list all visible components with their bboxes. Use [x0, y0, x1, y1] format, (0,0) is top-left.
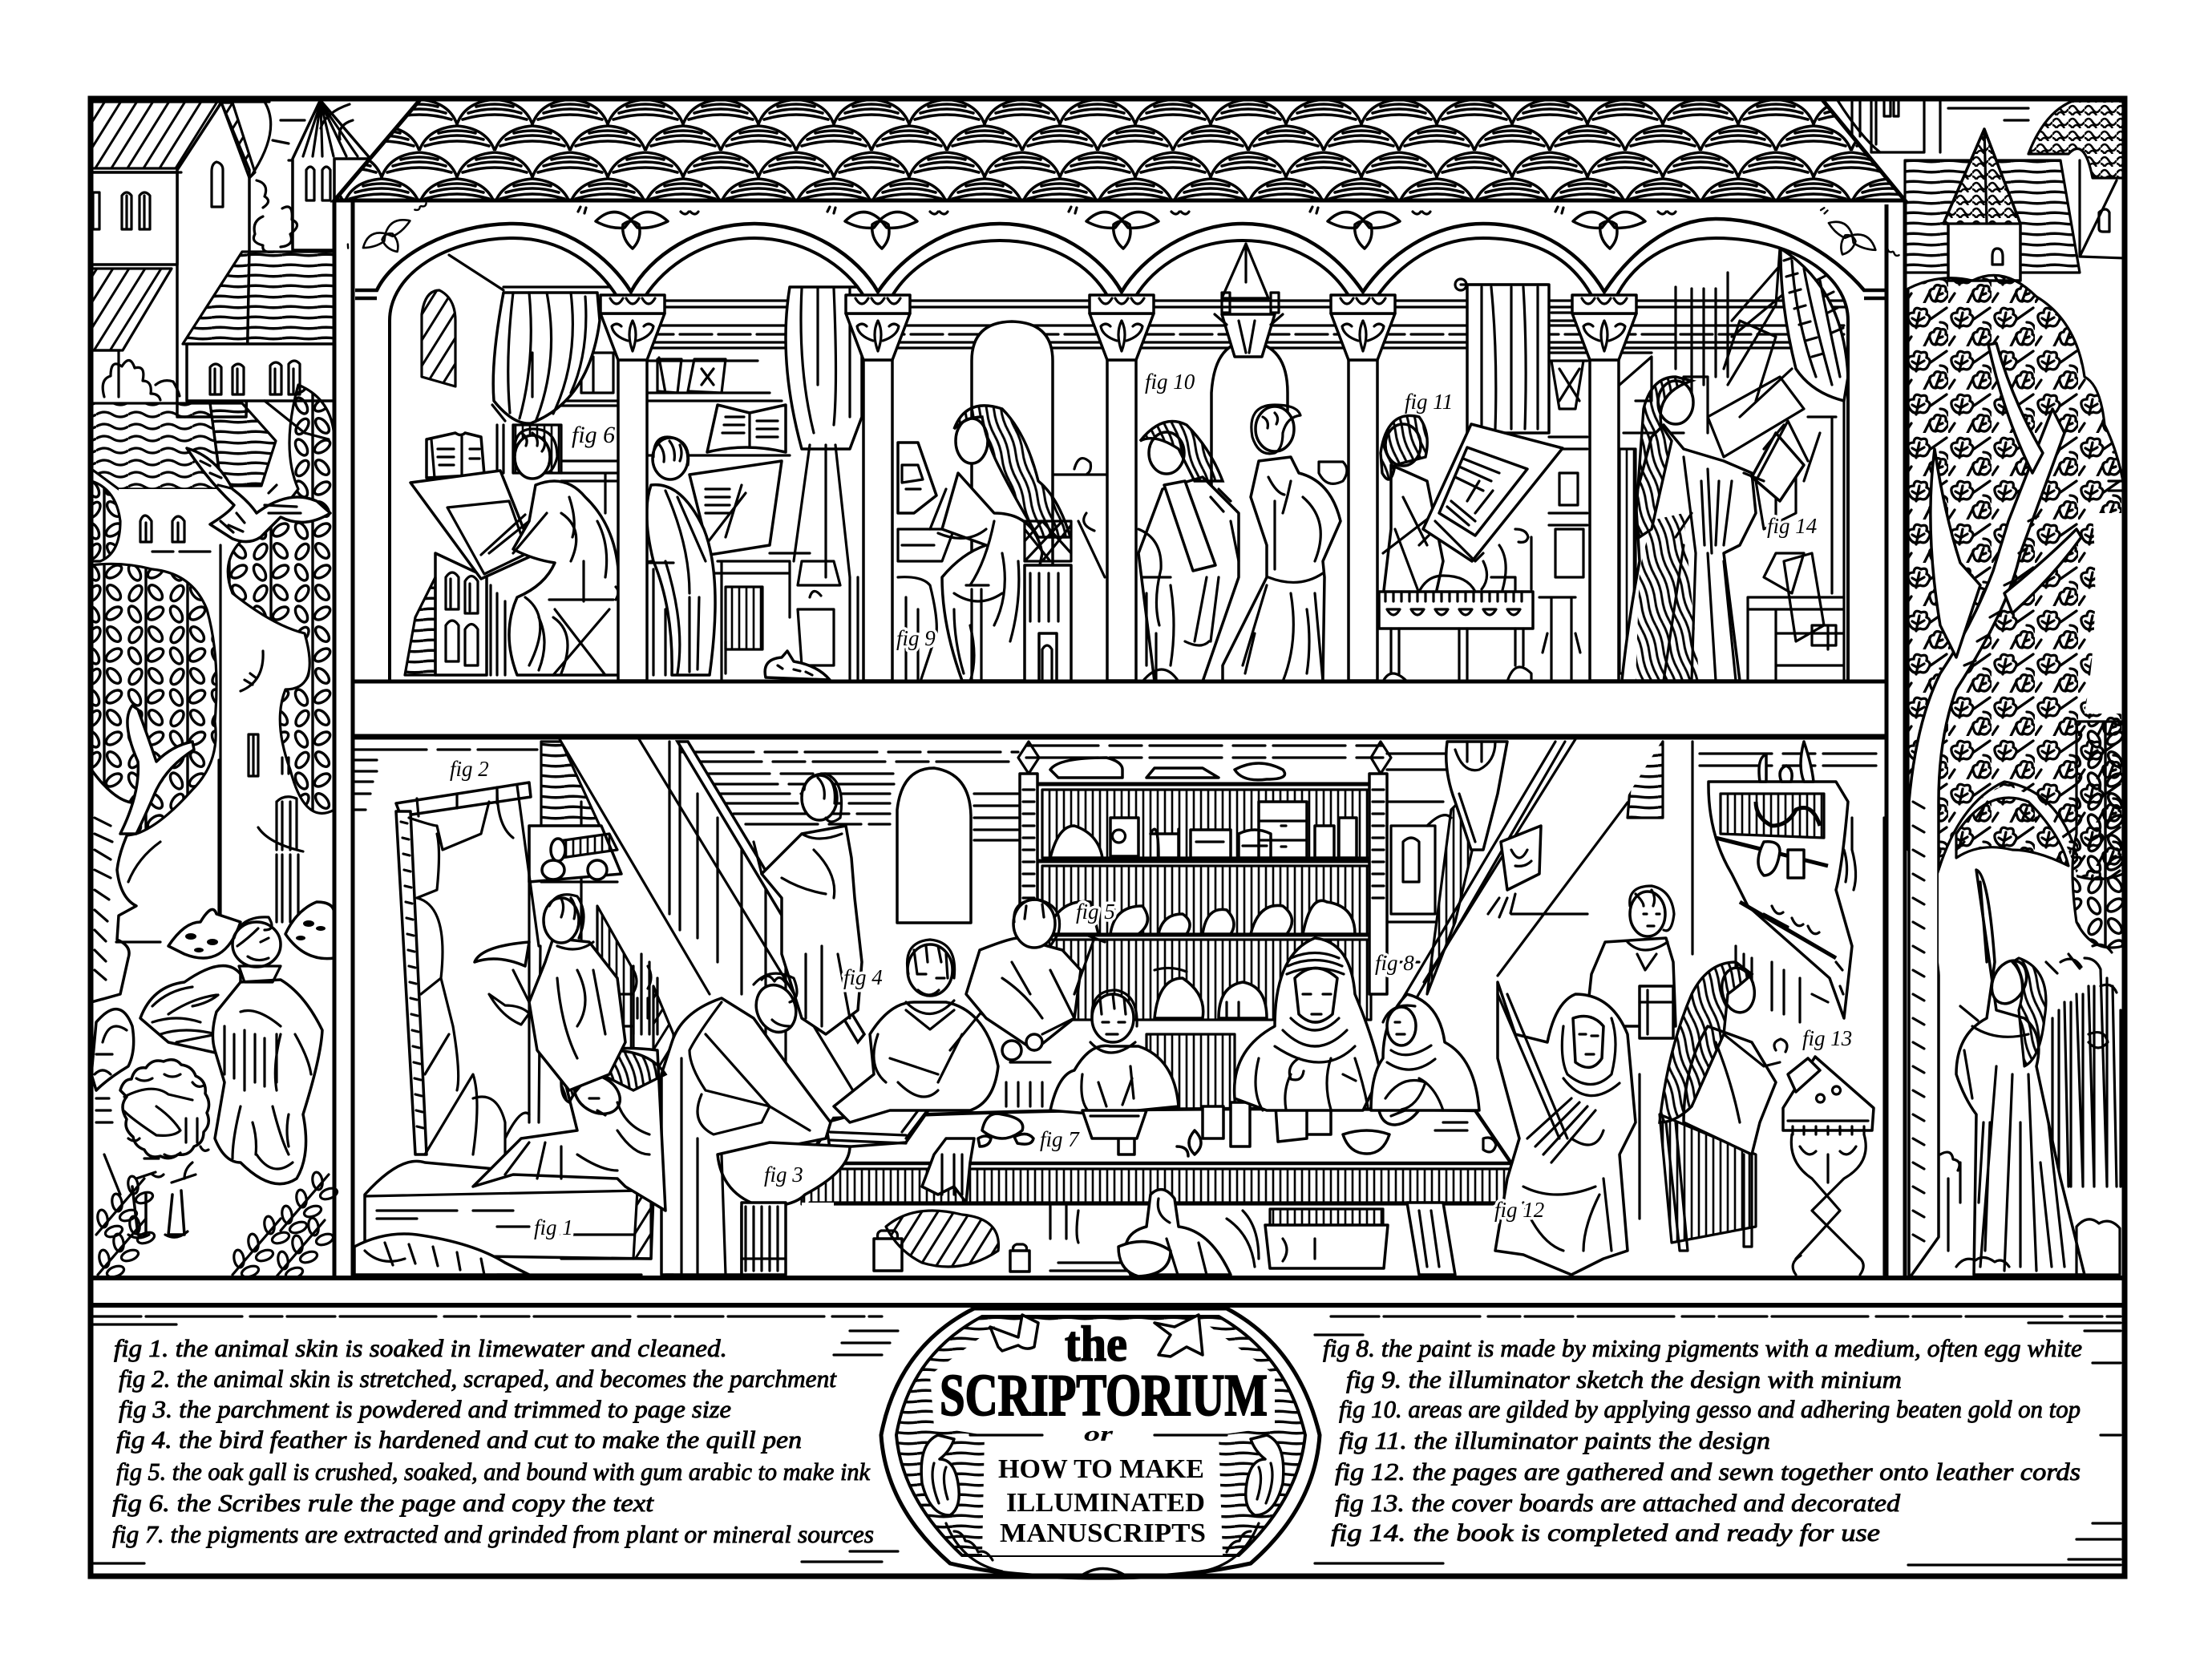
fig 3 label: fig 3 [764, 1163, 803, 1187]
cartouche leaf left [990, 1315, 1038, 1351]
curtain bay 2 [786, 287, 862, 449]
panel: town and tree on the right [1836, 98, 2125, 1279]
striped roof behind turret [1905, 160, 2080, 273]
top shelf items [1050, 758, 1284, 780]
figure: monk with hammer [966, 900, 1105, 1106]
curtain bay 5 [1467, 285, 1549, 433]
page lectern [689, 461, 782, 555]
eagle in flight [187, 401, 330, 542]
lattice chair [1025, 521, 1071, 561]
fig 2 label: fig 2 [450, 757, 489, 781]
background tower [233, 102, 305, 249]
figure: boy cutting quill [834, 940, 998, 1122]
fig 12 label: fig 12 [1494, 1198, 1544, 1222]
fig 11 label: fig 11 [1405, 390, 1453, 414]
figure: long-haired woman at desk [1640, 962, 1787, 1251]
cartouche [881, 1308, 1320, 1578]
heading: the: the [1065, 1317, 1127, 1372]
upper floor: bay 6 woman with book [1620, 249, 1848, 681]
reading book [427, 433, 484, 478]
box on floor [1265, 1209, 1388, 1268]
lower floor [354, 739, 1885, 1276]
striped side roof [210, 403, 276, 486]
oak foliage [1908, 275, 2123, 879]
middle shelf items [1046, 900, 1355, 934]
fig 10 label: fig 10 [1145, 370, 1195, 394]
wall hatch triangle left [541, 742, 600, 826]
frieze table [1379, 592, 1533, 629]
window ruin and broken column [249, 734, 303, 922]
fig 8 label: fig 8 [1375, 951, 1414, 975]
figure: monk with stretched skin [475, 895, 625, 1090]
hedge [140, 966, 241, 1058]
subheading line 3: MANUSCRIPTS [1000, 1518, 1206, 1548]
legend: figures 1 to 7: fig 3. the parchment is powdered and trimmed to page size [119, 1395, 731, 1423]
heading: Scriptorium: SCRIPTORIUM [940, 1363, 1268, 1429]
cat [765, 651, 830, 680]
legend: figures 8 to 14: fig 10. areas are gilded by applying gesso and adhering beaten gold on top [1339, 1395, 2081, 1423]
upper floor: bay 5 painter [1379, 279, 1587, 681]
open book on shelf [707, 405, 786, 452]
lower shelf items [1155, 978, 1267, 1018]
wavy tiled roof [91, 403, 221, 489]
acanthus left [921, 1435, 959, 1515]
fig 5 label: fig 5 [1076, 900, 1115, 924]
table items [826, 1090, 1496, 1203]
legend: figures 1 to 7 [112, 1334, 874, 1548]
lower shelf books and chest [1748, 473, 1844, 681]
back building top right [1836, 98, 2028, 152]
figure: shepherd monk [212, 917, 322, 1184]
fig 14 label: fig 14 [1767, 514, 1817, 538]
dog with bowl [1118, 1190, 1259, 1276]
siding hatch beside lectern [405, 577, 435, 675]
slanted desk [898, 443, 936, 513]
fig 1 label: fig 1 [534, 1215, 573, 1239]
legend: figures 1 to 7: fig 4. the bird feather is hardened and cut to make the quill pen [116, 1425, 802, 1454]
upper floor: bay 2 reader [643, 287, 862, 681]
standing boy behind [1511, 886, 1676, 1026]
floor plants and jars [874, 1211, 1138, 1272]
lower town wall [119, 489, 218, 491]
legend: figures 8 to 14: fig 12. the pages are gathered and sewn together onto leather cords [1335, 1458, 2081, 1486]
big white staircase stringer left [560, 739, 856, 1096]
chair [643, 561, 673, 675]
figure: monk on stairs [754, 774, 862, 1034]
cartouche leaf right [1155, 1315, 1203, 1357]
siding, back wall [354, 739, 1885, 1276]
front wall with arches [353, 200, 1886, 681]
outer arch line [355, 219, 1886, 298]
stretched skin outline [409, 790, 529, 1154]
stretching frame [396, 782, 540, 1154]
bushes behind shepherd [168, 909, 241, 958]
chair [1660, 1114, 1756, 1243]
writing board [410, 471, 534, 579]
long table apron [802, 1109, 1511, 1204]
legend: figures 1 to 7: fig 6. the Scribes rule the page and copy the text [112, 1489, 655, 1517]
figure: young woman at table [1371, 994, 1479, 1110]
bottom shelf area left [609, 954, 657, 1034]
foliage: right of bird [228, 385, 334, 813]
table legs [802, 1203, 1455, 1275]
lower house with windows [187, 344, 334, 401]
shrubs bottom right [1940, 1152, 2120, 1275]
upper floor: bay 1 scribe [390, 237, 619, 678]
small window [422, 290, 455, 386]
slanted gilding desk [1164, 481, 1215, 571]
legend: figures 8 to 14: fig 8. the paint is made by mixing pigments with a medium, often egg white [1323, 1334, 2082, 1362]
hanging acorn branch [1956, 798, 2068, 866]
figure: woman reaching into tree [1956, 870, 2085, 1275]
figure from behind [647, 485, 715, 675]
floor beam [353, 681, 1886, 736]
legend: figures 1 to 7: fig 5. the oak gall is crushed, soaked, and bound with gum arabic to make ink [116, 1458, 871, 1486]
subheading line 2: ILLUMINATED [1006, 1488, 1205, 1518]
turret [1943, 129, 2020, 281]
legend: figures 8 to 14: fig 9. the illuminator sketch the design with minium [1346, 1365, 1902, 1393]
spandrel leaf ornaments [346, 200, 1901, 279]
figure: trimming monk with fig 3 cloth [661, 973, 850, 1275]
footer border lines [91, 1278, 2123, 1305]
legend: figures 1 to 7: fig 1. the animal skin is soaked in limewater and cleaned. [114, 1334, 727, 1362]
figure: nun fig 8 [1235, 938, 1381, 1110]
hanging skins on table edge [922, 1138, 974, 1203]
upper floor: bay 3 window and illuminator [896, 321, 1106, 681]
figure: woman leaning over vat [473, 1049, 665, 1211]
right stair and hanging monk [1387, 739, 1663, 1110]
back shelves [541, 802, 617, 1058]
fig 4 label: fig 4 [843, 965, 883, 989]
shelf and books behind curtain [561, 353, 619, 513]
foliage: small bush under roof [91, 481, 120, 561]
left building and windows [91, 172, 177, 265]
pile of paper [826, 1097, 934, 1148]
lectern base [435, 553, 487, 675]
tree trunk left [93, 770, 138, 1003]
siding right [1628, 742, 1663, 818]
chandelier [1222, 244, 1268, 298]
legend: figures 8 to 14: fig 13. the cover boards are attached and decorated [1335, 1489, 1901, 1517]
upper fork branches [1988, 343, 2081, 613]
panel: building interior [334, 98, 1905, 1279]
held book [1752, 433, 1804, 501]
cartouche white center [930, 1321, 1275, 1555]
tree trunk with bark marks [1909, 409, 2064, 1279]
legend: figures 8 to 14: fig 11. the illuminator paints the design [1339, 1426, 1770, 1454]
building outer walls [334, 200, 1905, 1279]
hatch behind monk on left [597, 906, 633, 1066]
acanthus right [1246, 1435, 1284, 1515]
hammer [1074, 934, 1105, 994]
stair balusters and handrail [669, 742, 864, 1066]
small bush [103, 360, 180, 400]
wall panel [1692, 742, 1884, 1275]
woman illuminator [942, 473, 1042, 681]
lamp post [217, 758, 220, 914]
back curtain column [1676, 273, 1728, 401]
floor skins left [354, 1234, 529, 1275]
fig 9 label: fig 9 [896, 626, 936, 650]
connector: or: or [1084, 1422, 1114, 1446]
wall cabinet [1709, 742, 1856, 1022]
falling feather [241, 651, 263, 691]
painter figure [1383, 465, 1443, 597]
roof of scale tiles [334, 98, 1905, 200]
stacks of rolls [529, 826, 621, 882]
upper floor background wall [353, 200, 1886, 681]
bookshelves [1620, 249, 1804, 457]
columns with capitals [601, 295, 1636, 681]
book stack in hands of boy [1640, 986, 1673, 1038]
figure: sheep front [120, 1060, 209, 1238]
reeds right [2046, 944, 2121, 1187]
fig 1 vat [365, 1161, 653, 1259]
hunched gilder [1138, 477, 1239, 681]
second striped roof [91, 269, 172, 350]
fig 6 label: fig 6 [572, 422, 615, 448]
striped rooftop top left [91, 102, 221, 168]
big book on lectern [1423, 424, 1563, 561]
window lower [897, 768, 971, 923]
legend: figures 1 to 7: fig 2. the animal skin is stretched, scraped, and becomes the parchment [119, 1365, 837, 1393]
left tree white branches [120, 706, 194, 834]
panel: town on the left [91, 102, 370, 1280]
figure: boy with mortar [1050, 990, 1179, 1138]
curtain bay 6 [1781, 249, 1848, 401]
fig 7 label: fig 7 [1040, 1127, 1080, 1151]
arched tile roof top right [2028, 101, 2123, 178]
bush by tower [253, 180, 297, 252]
legend: figures 8 to 14: fig 14. the book is completed and ready for use [1331, 1518, 1880, 1547]
berries [1002, 1034, 1042, 1060]
woman holding book [1622, 425, 1756, 681]
subheading line 1: HOW TO MAKE [998, 1454, 1204, 1484]
sheep back [91, 1009, 134, 1090]
big shelves with jars [1018, 742, 1391, 1110]
panel: legend footer [91, 1278, 2123, 1578]
page held [1501, 826, 1541, 890]
folding stool [549, 587, 618, 675]
shrubs bottom left [96, 1175, 154, 1239]
fig 13 label: fig 13 [1802, 1026, 1852, 1050]
white sky gap right of tree [2085, 513, 2123, 714]
legend: figures 8 to 14 [1323, 1334, 2082, 1547]
X-legged desk [1783, 1057, 1874, 1275]
inner arch line [390, 238, 1848, 681]
clearing under tree [1939, 786, 2077, 1275]
gable house [177, 103, 249, 417]
foliage: left tree [91, 564, 216, 835]
boy in robe [1223, 457, 1341, 681]
upper floor: bay 4 gilder and boy [1138, 244, 1347, 681]
dark foliage far right [2072, 722, 2123, 948]
legend: figures 1 to 7: fig 7. the pigments are extracted and grinded from plant or mineral sources [112, 1520, 874, 1548]
hand and scraper [475, 942, 529, 966]
middle striped roof [183, 252, 334, 344]
figure: woman sewing book fig 12 [1495, 982, 1636, 1275]
curtain bay 1 [493, 293, 600, 423]
scribe figure [509, 481, 619, 675]
radiator hatch [726, 587, 762, 649]
window [1211, 342, 1288, 641]
